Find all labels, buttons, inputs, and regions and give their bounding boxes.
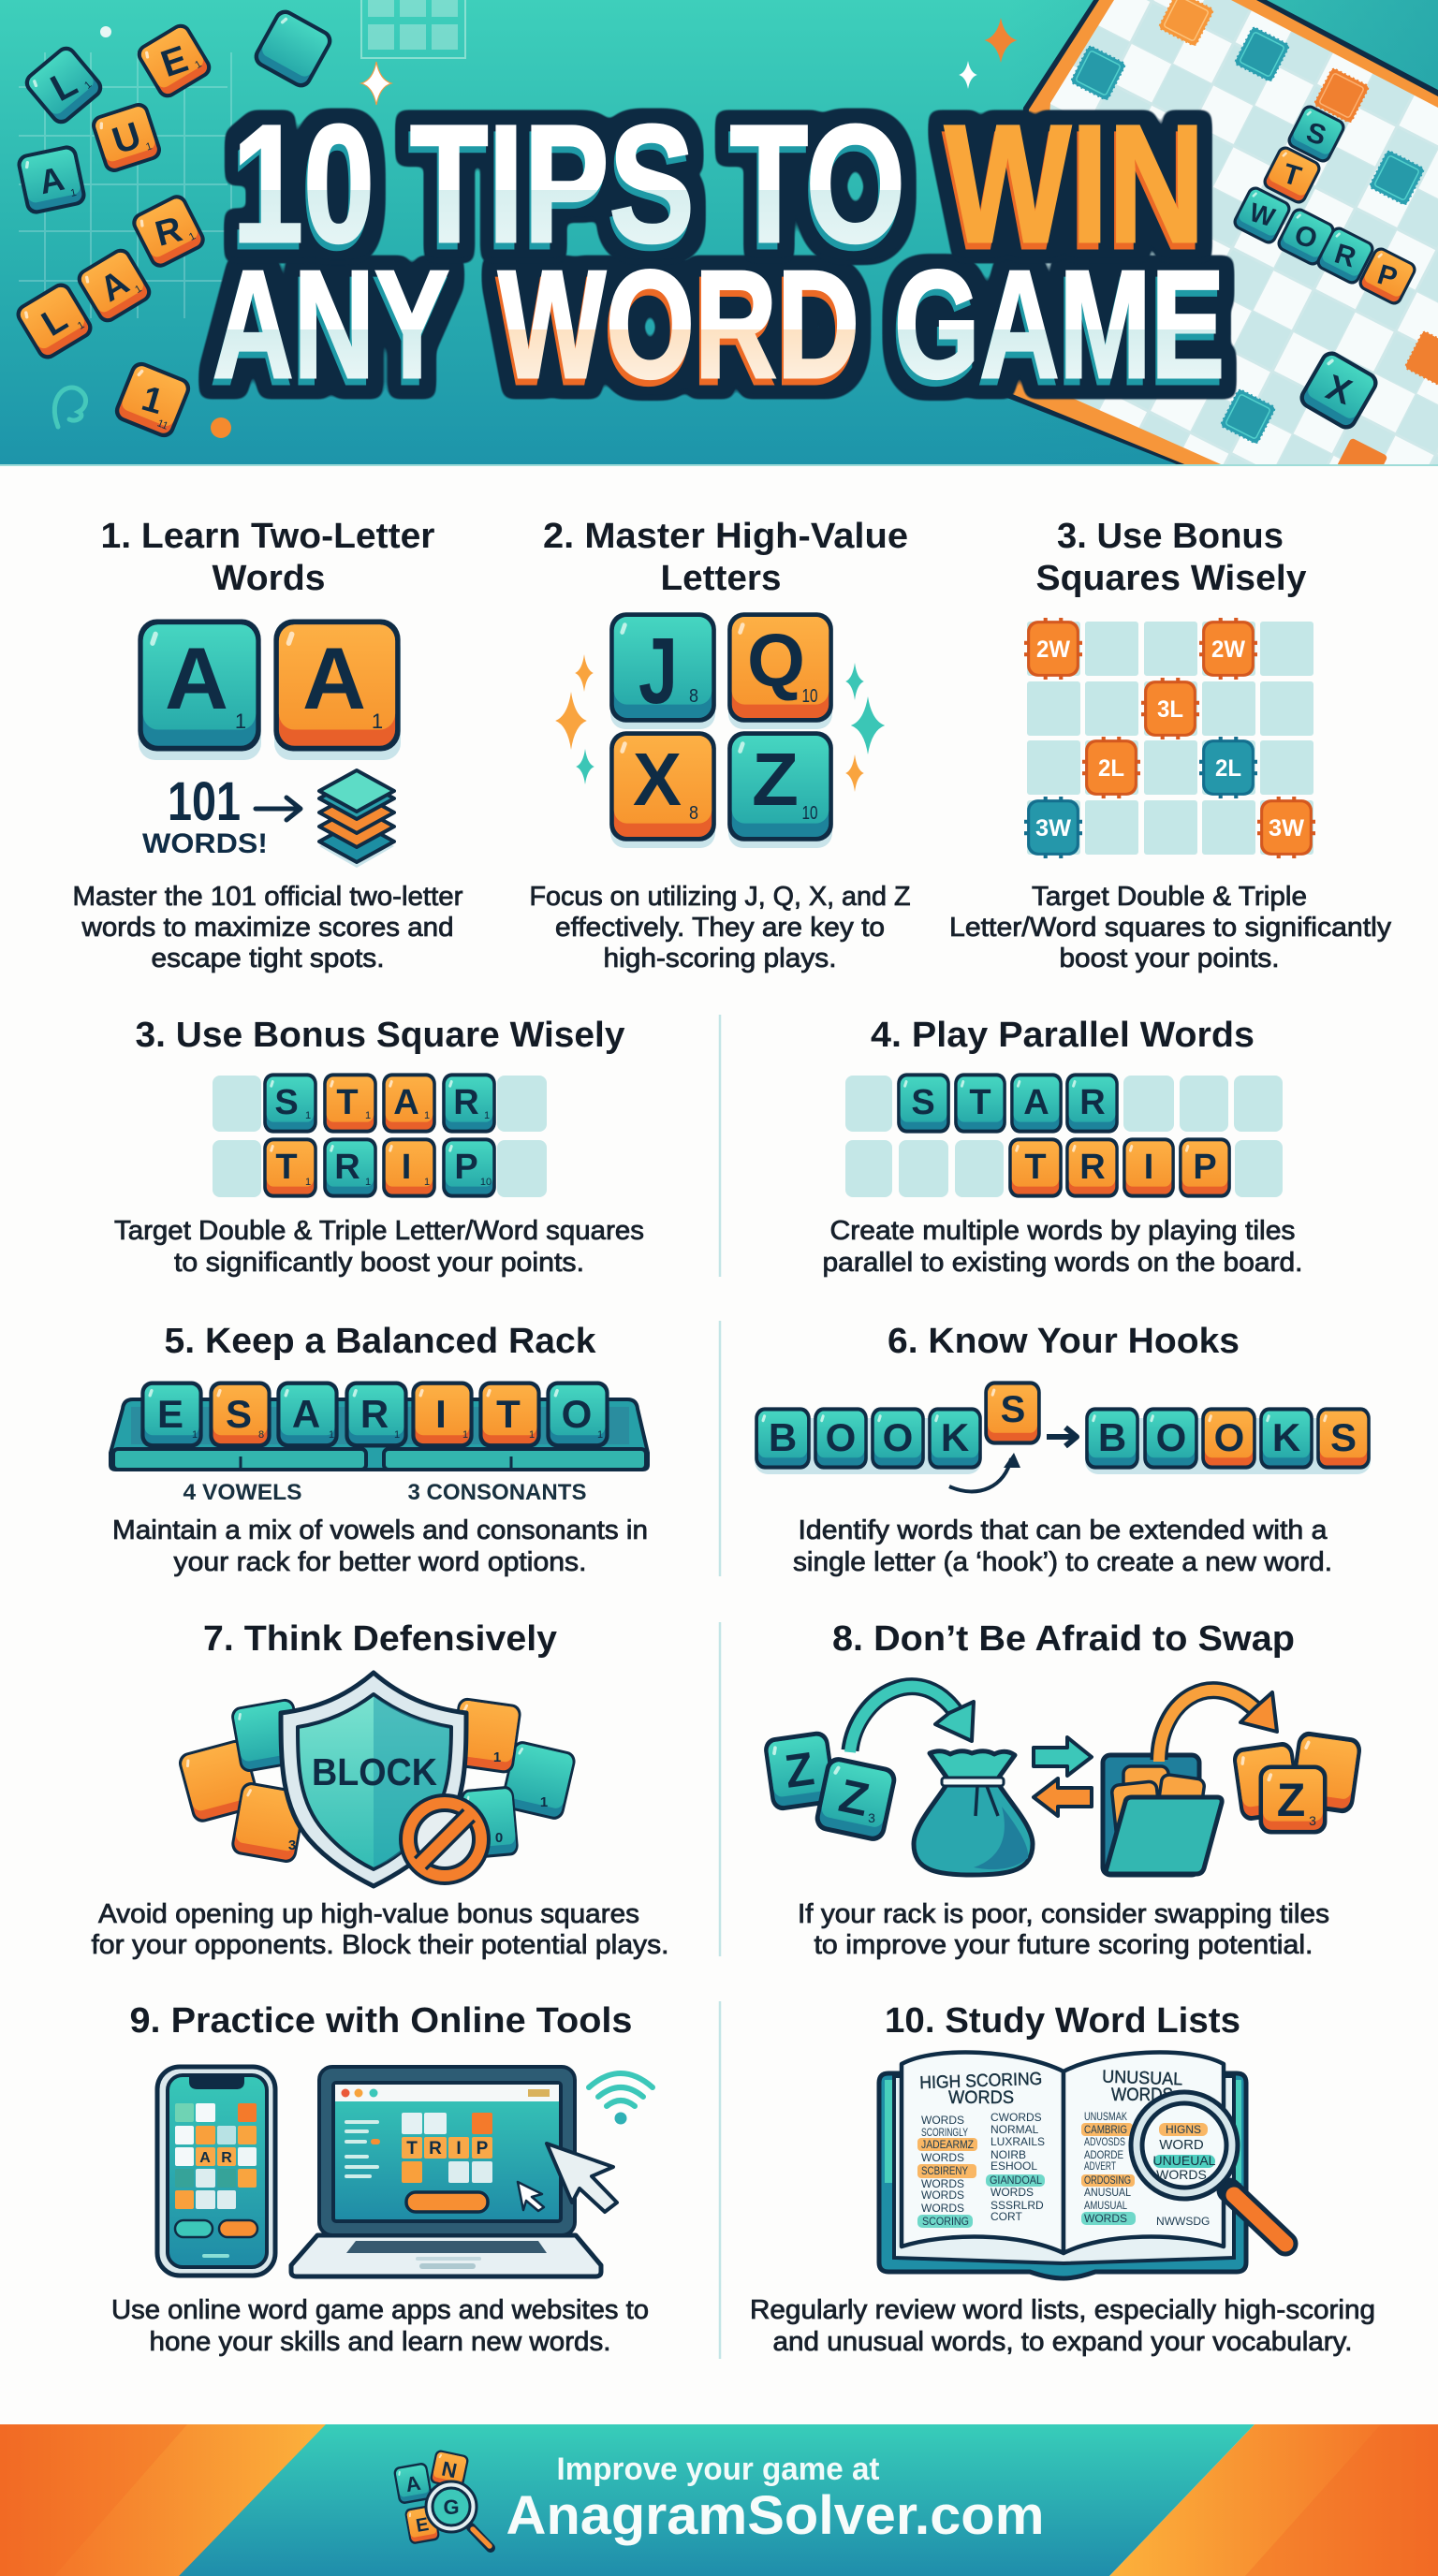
description tip 1: Master the 101 official two-letter [73, 882, 463, 912]
illustration: block shield with tiles: 1 [493, 1749, 501, 1765]
illustration: laptop: T [406, 2139, 418, 2159]
icon: magnifier: WORD [1159, 2137, 1204, 2153]
illustration: AA tiles: A [302, 629, 366, 727]
loose tiles on the left: 11 [155, 417, 169, 432]
page headings: WORDS [948, 2088, 1014, 2108]
description tip 10: Regularly review word lists, especially high-scoring [750, 2295, 1375, 2325]
icon: wifi [589, 2073, 653, 2125]
heading tip 2: Letters [661, 559, 781, 598]
illustration: STAR TRIP tiles on cells: 1 [305, 1177, 311, 1188]
heading tip 5: 5. Keep a Balanced Rack [165, 1322, 596, 1361]
word columns: GIANDOAL [990, 2174, 1042, 2187]
illustration: STAR TRIP tiles on cells: A [393, 1083, 419, 1122]
illustration: JQXZ tiles: 10 [801, 803, 818, 824]
illustration: STAR TRIP tiles on cells: 1 [305, 1110, 311, 1121]
heading tip 1: 1. Learn Two-Letter [101, 517, 435, 556]
word columns: WORDS [921, 2202, 964, 2215]
rack labels: 4 VOWELS [183, 1480, 301, 1505]
word columns: NWWSDG [1156, 2215, 1210, 2228]
loose tiles on the left: R [152, 210, 186, 255]
illustration: STAR TRIP tiles on cells: P [454, 1148, 478, 1187]
description tip 9 [111, 2295, 649, 2357]
description bonus square: Target Double & Triple Letter/Word squares [114, 1216, 644, 1246]
bag [914, 1751, 1033, 1875]
illustration: tile rack: I [435, 1392, 447, 1436]
description tip 1: words to maximize scores and [81, 913, 453, 943]
page headings: WORDS [1111, 2086, 1173, 2105]
illustration: swap tiles [762, 1687, 1363, 1875]
101 words arrow to stack: 101 [168, 771, 241, 832]
loose tiles on the left: L [36, 300, 74, 344]
illustration: bonus grid: 3W [1269, 815, 1304, 842]
highlights [917, 2123, 1136, 2228]
word columns: ADORDE [1084, 2148, 1123, 2161]
heading tip 2: 2. Master High-Value [543, 517, 908, 556]
description tip 7: Avoid opening up high-value bonus squares [98, 1899, 639, 1929]
description tip 8 [798, 1899, 1329, 1960]
illustration: JQXZ tiles: 10 [801, 686, 818, 707]
illustration: tile rack [110, 1381, 648, 1470]
heading tip 3: Squares Wisely [1035, 559, 1307, 598]
illustration: phone: R [221, 2150, 232, 2166]
footer logo [393, 2449, 491, 2548]
panel: tip 8 don't be afraid to swap [762, 1619, 1363, 1960]
illustration: tile rack: T [496, 1392, 521, 1436]
heading tip 3 [1035, 517, 1307, 598]
heading tip 9: 9. Practice with Online Tools [129, 2001, 633, 2041]
description tip 3: boost your points. [1060, 944, 1279, 973]
icon: big cursor [547, 2144, 617, 2212]
illustration: bonus grid: 2L [1215, 755, 1241, 782]
illustration: JQXZ tiles: Q [747, 619, 805, 702]
description tip 5: your rack for better word options. [174, 1547, 586, 1577]
illustration: STAR TRIP tiles on cells: R [453, 1083, 479, 1122]
rack labels: 3 CONSONANTS [408, 1480, 586, 1505]
description tip 8: If your rack is poor, consider swapping tiles [798, 1899, 1329, 1929]
illustration: tile rack: 1 [329, 1429, 334, 1441]
illustration: open book [879, 2053, 1246, 2278]
word columns: JADEARMZ [921, 2138, 974, 2151]
loose tiles on the left: 1 [138, 379, 168, 422]
word columns: WORDS [921, 2114, 964, 2127]
illustration: tile rack: A [292, 1392, 320, 1436]
word columns: SCORING [922, 2215, 969, 2228]
illustration: laptop: R [429, 2139, 442, 2159]
word tiles on board: R [1331, 239, 1359, 274]
Z tiles left [762, 1730, 899, 1843]
description tip 4: parallel to existing words on the board. [822, 1248, 1303, 1278]
word columns: UNUSMAK [1084, 2110, 1127, 2123]
word columns: LUXRAILS [990, 2135, 1045, 2148]
illustration: tile rack: E [157, 1392, 183, 1436]
illustration: JQXZ tiles: 8 [689, 803, 698, 824]
description tip 2 [530, 882, 910, 973]
illustration: laptop [291, 2067, 601, 2276]
heading tip 2 [543, 517, 908, 598]
footer logo: E [415, 2514, 431, 2537]
word columns: WORDS [990, 2186, 1034, 2199]
illustration: tile rack: O [562, 1392, 592, 1436]
description tip 7 [92, 1899, 668, 1960]
word columns: ADVOSDS [1084, 2135, 1125, 2148]
illustration: bonus grid: 3W [1035, 815, 1071, 842]
loose tiles on the left: 1 [145, 140, 154, 154]
word columns: WORDS [921, 2151, 964, 2164]
illustration: JQXZ tiles: J [638, 619, 678, 724]
loose tiles on the left: 1 [76, 319, 86, 332]
illustration: hook tiles: O [1156, 1415, 1186, 1459]
illustration: STAR TRIP tiles on cells: S [274, 1083, 299, 1122]
icon: magnifier: UNUEUAL [1153, 2153, 1216, 2168]
rack labels [183, 1480, 586, 1505]
footer logo: G [443, 2496, 460, 2519]
sparkles and dots [54, 18, 1017, 438]
heading tip 7: 7. Think Defensively [203, 1619, 557, 1659]
description tip 9: Use online word game apps and websites to [111, 2295, 649, 2325]
illustration: phone: A [199, 2150, 211, 2166]
description tip 10 [750, 2295, 1375, 2357]
page headings: HIGH SCORING [919, 2070, 1043, 2093]
word tiles on board: T [1279, 158, 1304, 193]
title: 10 TIPS TO [232, 90, 905, 277]
illustration: hook tiles: O [883, 1415, 913, 1459]
illustration: JQXZ tiles: X [633, 738, 682, 821]
word columns: CORT [990, 2210, 1022, 2223]
title [213, 90, 1225, 410]
illustration: AA tiles: 1 [235, 710, 246, 733]
shield [281, 1673, 466, 1886]
illustration: tile rack: 1 [529, 1429, 535, 1441]
description tip 1 [73, 882, 463, 973]
illustration: bonus grid: 2W [1036, 637, 1070, 663]
icon: magnifier: WORDS [1156, 2167, 1207, 2182]
word tiles on board: X [1321, 368, 1357, 413]
orange arc arrow [1159, 1690, 1277, 1762]
illustration: tile rack: 1 [597, 1429, 603, 1441]
word tiles on board: O [1291, 219, 1321, 256]
no sign icon [401, 1795, 489, 1883]
illustration: JQXZ tiles: 8 [689, 686, 698, 707]
illustration: STAR TRIP tiles on cells: 1 [484, 1110, 490, 1121]
description tip 4: Create multiple words by playing tiles [829, 1216, 1296, 1246]
panel: tip 2 master high-value letters [530, 517, 910, 973]
panel: tip 1 learn two-letter words [73, 517, 463, 973]
panel: tip 6 know your hooks [755, 1322, 1371, 1577]
illustration: block shield with tiles: 3 [288, 1837, 296, 1853]
word columns: ADVERT [1084, 2159, 1116, 2173]
panel: tip 9 practice with online tools [111, 2001, 653, 2357]
footer text [506, 2452, 1045, 2546]
word tiles on board: S [1302, 117, 1329, 152]
title: WIN [945, 90, 1205, 277]
word columns: ANUSUAL [1084, 2186, 1131, 2199]
illustration: tile rack: 8 [258, 1429, 264, 1441]
loose tiles on the left: U [108, 115, 146, 162]
word columns: NORMAL [990, 2123, 1039, 2136]
description tip 3 [949, 882, 1392, 973]
panel: tip 10 study word lists [750, 2001, 1375, 2357]
illustration: bonus grid [1024, 618, 1315, 858]
illustration: block shield with tiles: 0 [495, 1830, 503, 1846]
illustration: laptop: I [456, 2139, 462, 2159]
illustration: hook tiles: O [826, 1415, 856, 1459]
Z tiles left: Z [834, 1769, 873, 1826]
loose tiles on the left: E [156, 38, 193, 85]
illustration: parallel tiles: S [911, 1083, 935, 1122]
word columns [921, 2110, 1210, 2228]
heading tip 4: 4. Play Parallel Words [871, 1016, 1255, 1055]
heading tip 1: Words [212, 559, 326, 598]
footer text: Improve your game at [556, 2452, 880, 2487]
illustration: hook tiles: K [941, 1415, 969, 1459]
illustration: parallel tiles: T [1024, 1148, 1047, 1187]
header banner [0, 0, 1438, 493]
illustration: AA tiles: A [165, 629, 228, 727]
illustration: block shield with tiles: 1 [540, 1794, 548, 1810]
title: ANY [213, 239, 449, 410]
panel: tip 3 use bonus squares wisely [949, 517, 1392, 973]
loose tiles on the left: L [44, 63, 84, 110]
game board [1000, 0, 1438, 493]
illustration: JQXZ tiles: Z [752, 738, 799, 821]
icon: magnifier: HIGNS [1166, 2123, 1201, 2136]
illustration: STAR TRIP tiles on cells: 1 [365, 1110, 371, 1121]
page headings: UNUSUAL [1102, 2068, 1183, 2089]
dividers [719, 1015, 721, 2359]
illustration: STAR TRIP tiles on cells: 1 [424, 1177, 430, 1188]
Z tiles right: Z [1277, 1774, 1305, 1826]
illustration: hook tiles [755, 1381, 1371, 1474]
illustration: parallel tiles: R [1079, 1083, 1106, 1122]
word columns: WORDS [1084, 2212, 1127, 2225]
illustration: STAR TRIP tiles on cells: 1 [424, 1110, 430, 1121]
heading tip 10: 10. Study Word Lists [885, 2001, 1240, 2041]
word columns: SCBIRENY [921, 2164, 968, 2177]
description tip 3: Letter/Word squares to significantly [949, 913, 1392, 943]
word columns: SCORINGLY [921, 2126, 968, 2139]
footer logo: N [440, 2457, 459, 2482]
description tip 4 [822, 1216, 1303, 1278]
loose tiles on the left [12, 6, 336, 441]
illustration: hook tiles: S [1330, 1415, 1357, 1459]
arrows: hook [949, 1427, 1077, 1491]
illustration: tile rack: R [360, 1392, 389, 1436]
illustration: STAR TRIP tiles on cells: I [402, 1148, 411, 1187]
footer logo: A [404, 2471, 422, 2496]
word columns: WORDS [921, 2177, 964, 2190]
footer banner [0, 2424, 1438, 2576]
description tip 3: Target Double & Triple [1032, 882, 1307, 912]
teal arc arrow [850, 1687, 974, 1752]
sparkles tip 2 [555, 654, 885, 792]
description tip 2: Focus on utilizing J, Q, X, and Z [530, 882, 910, 912]
loose tiles on the left: 1 [133, 284, 144, 296]
description tip 2: effectively. They are key to [555, 913, 885, 943]
folder [1103, 1755, 1222, 1875]
Z tiles right [1231, 1730, 1363, 1834]
Z tiles left: Z [782, 1742, 817, 1798]
illustration: laptop: P [477, 2139, 489, 2159]
page headings [919, 2068, 1183, 2108]
faint window grid [361, 0, 465, 58]
illustration: hook tiles: K [1272, 1415, 1300, 1459]
description bonus square [114, 1216, 644, 1278]
loose tiles on the left: A [94, 263, 136, 310]
panel: tip 4 play parallel words [822, 1016, 1303, 1278]
description bonus square: to significantly boost your points. [174, 1248, 584, 1278]
illustration: AA tiles: 1 [372, 710, 383, 733]
illustration: hook tiles: S [1001, 1389, 1025, 1430]
word columns: ESHOOL [990, 2159, 1037, 2173]
Z tiles right: 3 [1309, 1813, 1316, 1828]
word columns: CAMBRIG [1084, 2123, 1127, 2136]
footer text: AnagramSolver.com [506, 2485, 1045, 2546]
description tip 8: to improve your future scoring potential. [814, 1930, 1313, 1960]
heading bonus square: 3. Use Bonus Square Wisely [135, 1016, 625, 1055]
panel: tip 7 think defensively [92, 1619, 668, 1960]
illustration: parallel tiles: A [1023, 1083, 1049, 1122]
loose tiles on the left: 1 [69, 187, 78, 199]
Z tiles left: 3 [868, 1810, 875, 1825]
illustration: STAR TRIP tiles on cells: 1 [365, 1177, 371, 1188]
word columns: NOIRB [990, 2148, 1026, 2161]
loose tiles on the left: 1 [82, 80, 94, 92]
word columns: WORDS [921, 2188, 964, 2202]
loose tiles on the left: A [36, 159, 67, 201]
description tip 1: escape tight spots. [152, 944, 384, 973]
loose tiles on the left: 1 [187, 230, 198, 243]
description tip 5: Maintain a mix of vowels and consonants in [112, 1515, 648, 1545]
101 words arrow to stack [142, 770, 394, 868]
description tip 5 [112, 1515, 648, 1577]
illustration: hook tiles: O [1214, 1415, 1244, 1459]
word columns: AMUSUAL [1084, 2199, 1127, 2212]
101 words arrow to stack: WORDS! [142, 828, 268, 859]
illustration: tile rack: 1 [192, 1429, 198, 1441]
illustration: tile rack: S [226, 1392, 252, 1436]
illustration: hook tiles: B [1098, 1415, 1126, 1459]
description tip 6: single letter (a ‘hook’) to create a new word. [793, 1547, 1332, 1577]
illustration: tile rack: 1 [394, 1429, 400, 1441]
heading tip 1 [101, 517, 435, 598]
icon: magnifier [1131, 2092, 1285, 2244]
illustration: parallel tiles: P [1193, 1148, 1217, 1187]
illustration: phone [157, 2067, 275, 2276]
word columns: CWORDS [990, 2111, 1042, 2124]
description tip 6 [793, 1515, 1332, 1577]
description tip 9: hone your skills and learn new words. [150, 2327, 610, 2357]
illustration: parallel tiles: I [1144, 1148, 1153, 1187]
word tiles on board: P [1373, 259, 1401, 294]
description tip 6: Identify words that can be extended with a [798, 1515, 1328, 1545]
illustration: parallel tiles [845, 1073, 1283, 1198]
illustration: tile rack: 1 [462, 1429, 468, 1441]
title: GAME [894, 239, 1225, 410]
word columns: ORDOSING [1084, 2174, 1131, 2187]
illustration: STAR TRIP tiles on cells: T [275, 1148, 298, 1187]
illustration: AA tiles [138, 619, 401, 760]
word tiles on board [1230, 102, 1419, 433]
illustration: hook tiles: B [769, 1415, 797, 1459]
illustration: JQXZ tiles [609, 612, 833, 848]
heading tip 8: 8. Don’t Be Afraid to Swap [832, 1619, 1295, 1659]
illustration: bonus grid: 3L [1157, 696, 1183, 723]
illustration: bonus grid: 2L [1098, 755, 1124, 782]
panel: tip 5 keep a balanced rack [110, 1322, 648, 1577]
description tip 7: for your opponents. Block their potential plays. [92, 1930, 668, 1960]
bonus squares on board [1070, 0, 1438, 493]
illustration: bonus grid: 2W [1211, 637, 1245, 663]
word columns: SSSRLRD [990, 2199, 1044, 2212]
panel: use bonus square wisely row [114, 1016, 644, 1278]
swap arrows [1034, 1737, 1092, 1816]
illustration: parallel tiles: T [969, 1083, 991, 1122]
illustration: STAR TRIP tiles on cells: T [336, 1083, 359, 1122]
heading tip 6: 6. Know Your Hooks [888, 1322, 1240, 1361]
illustration: STAR TRIP tiles on cells: R [334, 1148, 360, 1187]
loose tiles on the left: 1 [193, 59, 204, 71]
description tip 2: high-scoring plays. [603, 944, 837, 973]
illustration: parallel tiles: R [1079, 1148, 1106, 1187]
shield: BLOCK [312, 1750, 437, 1793]
illustration: STAR TRIP tiles on cells [213, 1073, 547, 1198]
title: WORD [498, 239, 859, 410]
description tip 10: and unusual words, to expand your vocabulary. [773, 2327, 1352, 2357]
illustration: STAR TRIP tiles on cells: 10 [480, 1177, 492, 1188]
word tiles on board: W [1246, 198, 1279, 232]
illustration: block shield with tiles [176, 1673, 578, 1886]
heading tip 3: 3. Use Bonus [1057, 517, 1284, 556]
